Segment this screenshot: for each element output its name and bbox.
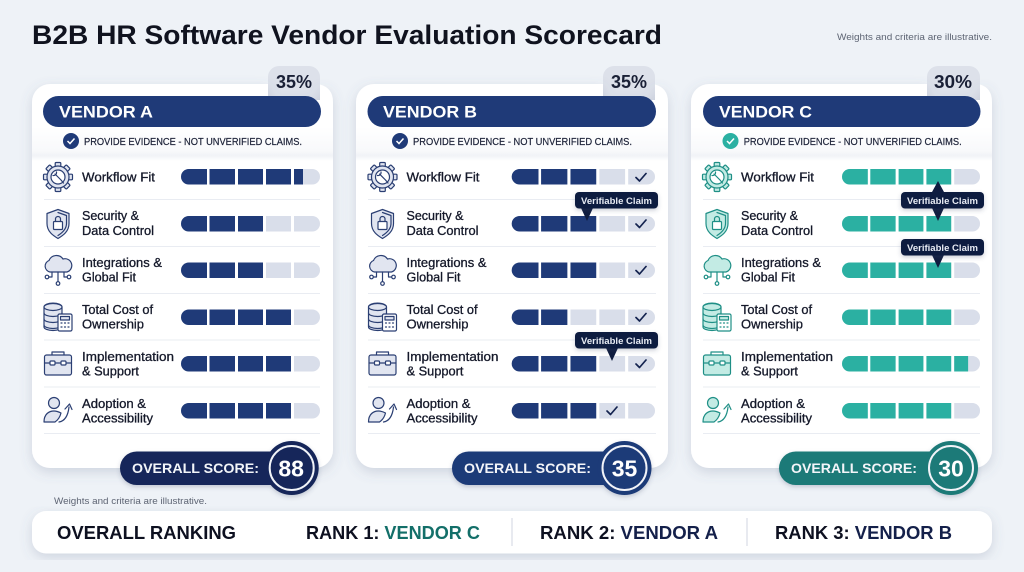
- ranking heading: OVERALL RANKING: [57, 523, 236, 543]
- overall score B: 35: [612, 456, 637, 482]
- row: Workflow Fit: [702, 162, 980, 192]
- label: Integrations &: [406, 256, 487, 270]
- score bar: [842, 169, 980, 184]
- row: Security: [372, 209, 655, 238]
- label: Global Fit: [406, 270, 461, 284]
- label: Accessibility: [741, 412, 813, 426]
- label: Security &: [82, 209, 140, 223]
- label: Adoption &: [82, 397, 147, 411]
- score bar: [181, 169, 320, 184]
- overall score C: OVERALL SCORE:: [791, 460, 917, 476]
- icon: database and calculator: [703, 303, 731, 331]
- check mark: [607, 407, 617, 414]
- icon: cloud: [704, 256, 731, 285]
- callout: verifiable claim, workflow and security: Verifiable Claim: [907, 196, 978, 207]
- row: Workflow Fit: [368, 162, 655, 192]
- overall score C: 30: [938, 456, 964, 482]
- label: Implementation: [82, 350, 174, 364]
- card A background: [32, 84, 333, 468]
- evidence note: PROVIDE EVIDENCE - NOT UNVERIFIED CLAIMS.: [744, 137, 962, 148]
- icon: briefcase: [44, 352, 72, 375]
- label: Workflow Fit: [82, 170, 156, 184]
- label: Security &: [741, 209, 799, 223]
- evidence band: [32, 127, 333, 161]
- callout: verifiable claim, implementation: [575, 332, 658, 361]
- score bar: [842, 216, 980, 232]
- label: Ownership: [82, 318, 144, 332]
- weight tab: 30%: 30%: [934, 72, 972, 92]
- icon: gear: [44, 162, 72, 192]
- callout: verifiable claim, implementation: Verifiable Claim: [581, 336, 652, 347]
- overall score C: [779, 441, 978, 495]
- check mark: [636, 314, 646, 321]
- vendor A header: [43, 96, 321, 127]
- evidence band: [356, 127, 668, 161]
- score bar: [512, 356, 655, 372]
- row: Security: [706, 209, 980, 238]
- overall score A: OVERALL SCORE:: [132, 460, 259, 476]
- score bar: [181, 310, 320, 325]
- label: Security &: [406, 209, 464, 223]
- score bar: [842, 310, 980, 325]
- label: Implementation: [741, 350, 833, 364]
- icon: cloud: [45, 256, 72, 285]
- overall score B: OVERALL SCORE:: [464, 460, 591, 476]
- panel: vendor C: [691, 66, 992, 495]
- evidence note: [63, 133, 302, 149]
- label: Integrations &: [82, 256, 163, 270]
- row: Security: [47, 209, 320, 238]
- icon: briefcase: [704, 352, 730, 375]
- vendor A header: VENDOR A: [59, 102, 153, 122]
- icon: shield: [47, 210, 69, 238]
- weight tab: 35%: [268, 66, 320, 116]
- note: top right: Weights and criteria are illustrative.: [837, 32, 992, 43]
- row: Implementation: [44, 350, 320, 378]
- score bar: [512, 403, 655, 418]
- label: & Support: [741, 364, 799, 378]
- score bar: [842, 356, 980, 372]
- weight tab: 35%: [603, 66, 655, 116]
- score bar: [181, 262, 320, 278]
- evidence note: [722, 133, 962, 149]
- vendor C header: [703, 96, 980, 127]
- label: Accessibility: [406, 412, 478, 426]
- score bar: [181, 356, 320, 372]
- row: Implementation: [369, 350, 655, 378]
- score bar: [842, 403, 980, 418]
- rank 1: RANK 1: VENDOR C: [306, 523, 480, 543]
- score bar: [842, 262, 980, 278]
- rank 3: RANK 3: VENDOR B: [775, 523, 952, 543]
- label: Workflow Fit: [741, 170, 815, 184]
- icon: person with arrow: [44, 398, 72, 422]
- label: & Support: [82, 364, 140, 378]
- score bar: [512, 216, 655, 232]
- check mark: [636, 360, 646, 368]
- label: Workflow Fit: [406, 170, 480, 184]
- label: Data Control: [82, 224, 154, 238]
- check mark: [636, 266, 646, 274]
- icon: database and calculator: [368, 303, 396, 331]
- row: Total Cost: [368, 303, 655, 332]
- evidence note: PROVIDE EVIDENCE - NOT UNVERIFIED CLAIMS.: [413, 137, 632, 148]
- icon: shield: [372, 210, 394, 238]
- rank 2: RANK 2: VENDOR A: [540, 523, 718, 543]
- row: Adoption: [368, 397, 655, 426]
- row: Integrations: [704, 256, 980, 285]
- weight tab: 35%: 35%: [611, 72, 647, 92]
- row: Total Cost: [44, 303, 320, 332]
- row: Implementation: [704, 350, 980, 378]
- label: Ownership: [406, 318, 469, 332]
- label: Accessibility: [82, 412, 154, 426]
- overall ranking bar: [32, 511, 992, 554]
- row: Adoption: [44, 397, 320, 426]
- evidence note: PROVIDE EVIDENCE - NOT UNVERIFIED CLAIMS.: [84, 137, 302, 148]
- row: Adoption: [703, 397, 980, 426]
- icon: person with arrow: [703, 398, 731, 422]
- callout: verifiable claim, security: [575, 192, 658, 221]
- check mark: [636, 174, 646, 181]
- card B background: [356, 84, 668, 468]
- callout: verifiable claim, integrations: Verifiable Claim: [907, 243, 978, 254]
- label: Implementation: [406, 350, 499, 364]
- label: Global Fit: [82, 270, 137, 284]
- vendor C header: VENDOR C: [719, 102, 812, 122]
- label: Adoption &: [741, 397, 806, 411]
- icon: gear: [368, 162, 397, 192]
- row: Total Cost: [703, 303, 980, 332]
- label: Global Fit: [741, 270, 796, 284]
- icon: shield: [706, 210, 728, 238]
- label: & Support: [406, 364, 464, 378]
- panel: vendor B: [356, 66, 668, 495]
- label: Data Control: [741, 224, 813, 238]
- label: Total Cost of: [406, 303, 478, 317]
- evidence band: [691, 127, 992, 161]
- label: Ownership: [741, 318, 803, 332]
- evidence note: [392, 133, 632, 149]
- row: Integrations: [45, 256, 320, 285]
- score bar: [512, 310, 655, 325]
- row: Integrations: [370, 256, 655, 285]
- icon: database and calculator: [44, 303, 72, 331]
- weight tab: 35%: 35%: [276, 72, 312, 92]
- card C background: [691, 84, 992, 468]
- label: Total Cost of: [741, 303, 813, 317]
- weight tab: 30%: [927, 66, 980, 116]
- label: Integrations &: [741, 256, 822, 270]
- label: Data Control: [406, 224, 478, 238]
- ranking bar background: [32, 511, 992, 554]
- note: bottom left: Weights and criteria are illustrative.: [54, 496, 207, 507]
- label: Total Cost of: [82, 303, 154, 317]
- vendor B header: VENDOR B: [383, 102, 477, 122]
- icon: gear: [702, 162, 732, 192]
- score bar: [181, 403, 320, 418]
- overall score A: [120, 441, 319, 495]
- icon: cloud: [370, 256, 396, 285]
- overall score B: [452, 441, 652, 495]
- callout: verifiable claim, workflow and security: [901, 181, 984, 221]
- label: Adoption &: [406, 397, 471, 411]
- icon: person with arrow: [368, 398, 396, 422]
- panel: vendor A: [32, 66, 333, 495]
- vendor B header: [368, 96, 656, 127]
- score bar: [512, 262, 655, 278]
- callout: verifiable claim, security: Verifiable Claim: [581, 196, 652, 207]
- overall score A: 88: [278, 456, 304, 482]
- score bar: [181, 216, 320, 232]
- score bar: [512, 169, 655, 184]
- callout: verifiable claim, integrations: [901, 239, 984, 268]
- title: B2B HR Software Vendor Evaluation Scorecard: [32, 20, 662, 50]
- check mark: [636, 220, 646, 228]
- row: Workflow Fit: [44, 162, 320, 192]
- icon: briefcase: [369, 352, 396, 375]
